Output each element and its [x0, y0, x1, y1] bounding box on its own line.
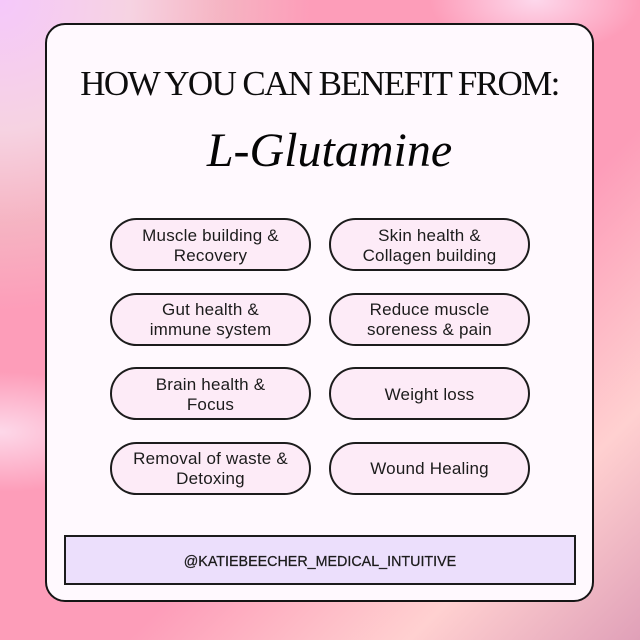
- pill: removal of waste: [110, 442, 311, 495]
- footer banner: social handle: [64, 535, 576, 585]
- footer banner: social handle: @KATIEBEECHER_MEDICAL_INTUITIVE: [184, 554, 456, 570]
- pill: reduce muscle soreness: [329, 293, 530, 346]
- heading: how you can benefit from: HOW YOU CAN BENEFIT FROM:: [80, 64, 559, 103]
- pill: brain health: [110, 367, 311, 420]
- pill: wound healing: Wound Healing: [370, 459, 489, 478]
- pill: weight loss: Weight loss: [385, 385, 474, 404]
- pill: weight loss: [329, 367, 530, 420]
- pill: reduce muscle soreness: Reduce muscle soreness & pain: [367, 300, 492, 338]
- pill: muscle building: [110, 218, 311, 271]
- title: L-Glutamine: L-Glutamine: [207, 124, 452, 177]
- pill: skin health: Skin health & Collagen building: [363, 226, 496, 264]
- pill: gut health: [110, 293, 311, 346]
- pill: muscle building: Muscle building & Recovery: [142, 226, 279, 264]
- pill: brain health: Brain health & Focus: [156, 375, 265, 414]
- pill: wound healing: [329, 442, 530, 495]
- pill: gut health: Gut health & immune system: [150, 300, 271, 338]
- panel: white card: [45, 23, 594, 602]
- pill: removal of waste: Removal of waste & Detoxing: [133, 449, 288, 488]
- pill: skin health: [329, 218, 530, 271]
